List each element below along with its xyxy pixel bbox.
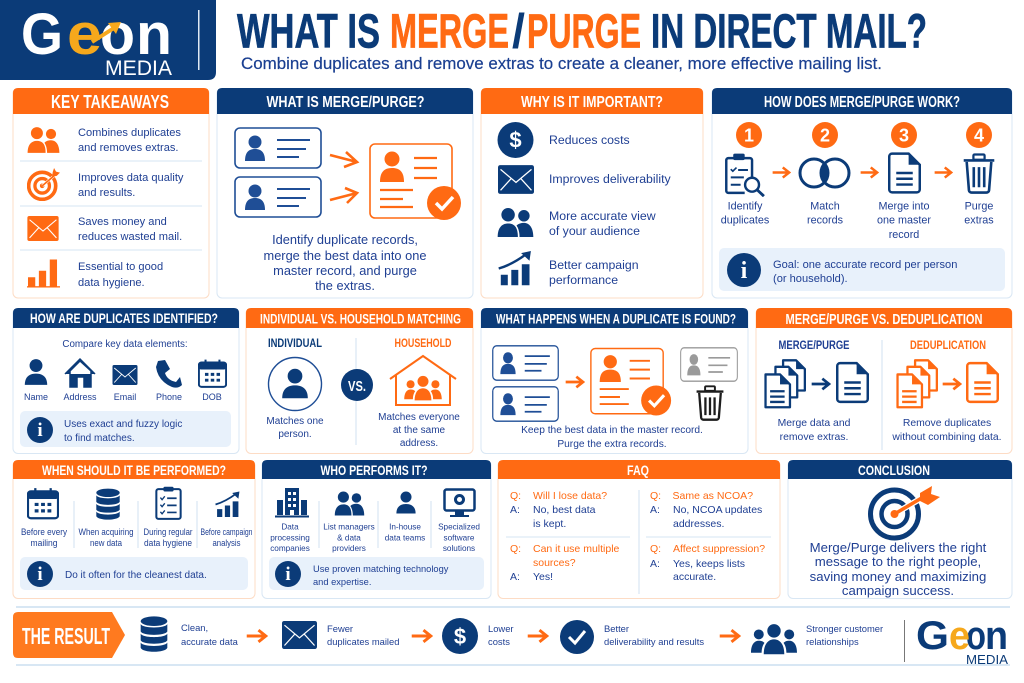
logo: Geon Media footer: e bbox=[949, 614, 970, 658]
conclusion text: message to the right people, bbox=[815, 554, 981, 569]
FAQ answers: No, NCOA updates bbox=[673, 504, 762, 516]
icon: target bbox=[29, 168, 60, 199]
takeaway text 1: and removes extras. bbox=[78, 142, 179, 154]
FAQ answers: Yes, keeps lists bbox=[673, 558, 745, 570]
result strip bbox=[13, 606, 1010, 667]
panel: why is it important: WHY IS IT IMPORTANT? bbox=[521, 94, 663, 111]
step labels: record bbox=[889, 229, 919, 241]
performer labels: solutions bbox=[443, 544, 475, 553]
result 3: costs bbox=[488, 636, 510, 647]
performer labels: processing bbox=[270, 534, 310, 542]
household heading: HOUSEHOLD bbox=[394, 336, 452, 350]
takeaway text 2: and results. bbox=[78, 187, 135, 199]
merge/purge text: remove extras. bbox=[780, 432, 848, 443]
result 1: Clean, bbox=[181, 622, 208, 633]
reason 3: of your audience bbox=[549, 224, 640, 238]
result 5: relationships bbox=[806, 636, 859, 647]
arrow bbox=[720, 630, 739, 642]
icon: growth chart bbox=[499, 251, 531, 285]
panel: when should it be performed bbox=[13, 460, 255, 598]
step numbers: 2 bbox=[820, 126, 830, 146]
panel: conclusion bbox=[788, 460, 1012, 598]
panel: FAQ: FAQ bbox=[627, 462, 649, 478]
merge/purge text: Merge data and bbox=[778, 418, 851, 429]
info callout: to find matches. bbox=[64, 433, 135, 444]
icon: dollar bbox=[442, 618, 478, 654]
timing labels: Before every bbox=[21, 527, 68, 537]
step labels: Purge bbox=[965, 200, 993, 212]
caption: Keep the best data in the master record. bbox=[521, 425, 703, 436]
household text: at the same bbox=[393, 425, 446, 436]
icon: envelope bbox=[282, 621, 317, 649]
title: MERGE bbox=[390, 6, 509, 58]
data element labels: Name bbox=[24, 392, 48, 402]
VS badge: VS. bbox=[348, 378, 366, 395]
icon: check bbox=[560, 620, 594, 654]
timing icons bbox=[28, 487, 239, 520]
arrow bbox=[773, 167, 789, 178]
icon: trash bbox=[964, 154, 994, 193]
icon: database bbox=[141, 616, 167, 652]
performer labels: software bbox=[444, 534, 475, 542]
timing labels: data hygiene bbox=[144, 538, 192, 548]
panel: what happens when a duplicate is found bbox=[481, 308, 748, 454]
takeaway text 3: Saves money and bbox=[78, 216, 167, 228]
icon: bars bbox=[27, 259, 60, 288]
deduplication text: without combining data. bbox=[891, 432, 1002, 443]
FAQ questions: Q: bbox=[510, 543, 521, 555]
FAQ questions: Q: bbox=[650, 543, 661, 555]
info callout: i bbox=[37, 420, 43, 441]
arrow bbox=[412, 630, 431, 642]
conclusion text: Merge/Purge delivers the right bbox=[810, 540, 987, 555]
icon: audience bbox=[498, 208, 533, 237]
step labels: one master bbox=[877, 214, 931, 226]
step labels: duplicates bbox=[721, 214, 770, 226]
panel: key takeaways: KEY TAKEAWAYS bbox=[51, 92, 169, 112]
logo: Geon Media: n bbox=[136, 2, 172, 67]
logo: Geon Media: e bbox=[67, 2, 102, 67]
info callout: and expertise. bbox=[313, 577, 371, 587]
description: Identify duplicate records, bbox=[272, 232, 418, 247]
panel: individual vs household matching bbox=[246, 308, 473, 454]
master record bbox=[591, 348, 671, 416]
purged record bbox=[681, 348, 737, 381]
household icon bbox=[390, 356, 456, 405]
header banner with logo bbox=[0, 0, 216, 80]
icon: envelope bbox=[27, 216, 59, 241]
result 3: Lower bbox=[488, 623, 514, 634]
info callout bbox=[20, 411, 231, 447]
FAQ questions: Affect suppression? bbox=[673, 543, 765, 555]
FAQ questions: Q: bbox=[650, 490, 661, 502]
conclusion text: campaign success. bbox=[842, 583, 954, 598]
icon: envelope bbox=[498, 165, 534, 194]
FAQ answers: accurate. bbox=[673, 571, 716, 583]
FAQ answers: is kept. bbox=[533, 518, 566, 530]
logo: Geon Media footer: MEDIA bbox=[966, 652, 1008, 667]
panel: merge/purge vs deduplication bbox=[756, 308, 1012, 454]
panel: how are duplicates identified: HOW ARE DUPLICATES IDENTIFIED? bbox=[30, 310, 218, 326]
performer labels: data teams bbox=[385, 534, 425, 542]
FAQ answers: A: bbox=[650, 558, 660, 570]
panel: how are duplicates identified bbox=[13, 308, 239, 454]
FAQ questions: sources? bbox=[533, 557, 576, 569]
FAQ questions: Q: bbox=[510, 490, 521, 502]
result 5: Stronger customer bbox=[806, 623, 883, 634]
step numbers: 3 bbox=[899, 126, 909, 146]
FAQ answers: Yes! bbox=[533, 571, 553, 583]
FAQ questions: Same as NCOA? bbox=[672, 490, 753, 502]
FAQ answers: addresses. bbox=[673, 518, 724, 530]
reason 2: Improves deliverability bbox=[549, 172, 671, 186]
FAQ answers: A: bbox=[650, 504, 660, 516]
icon: document bbox=[889, 154, 920, 192]
panel: individual vs household matching: INDIVIDUAL VS. HOUSEHOLD MATCHING bbox=[260, 310, 461, 326]
title: / bbox=[512, 6, 525, 58]
step labels: records bbox=[807, 214, 844, 226]
timing labels: During regular bbox=[144, 527, 193, 537]
lead-in: Compare key data elements: bbox=[62, 339, 188, 350]
icon: trash bbox=[697, 386, 723, 420]
takeaway text 3: reduces wasted mail. bbox=[78, 231, 182, 243]
result 2: Fewer bbox=[327, 623, 353, 634]
logo: Geon Media: MEDIA bbox=[105, 57, 172, 80]
step labels: Match bbox=[810, 200, 840, 212]
icon: people bbox=[28, 127, 59, 153]
info callout: i bbox=[37, 564, 43, 585]
household text: address. bbox=[400, 438, 438, 449]
result 4: Better bbox=[604, 623, 629, 634]
description: merge the best data into one bbox=[264, 248, 426, 263]
description: the extras. bbox=[315, 278, 375, 293]
logo: Geon Media: o bbox=[100, 2, 135, 67]
title: WHAT IS bbox=[237, 6, 380, 58]
caption: Purge the extra records. bbox=[557, 439, 667, 450]
goal callout: Goal: one accurate record per person bbox=[773, 259, 957, 271]
goal callout bbox=[719, 248, 1005, 291]
performer labels: & data bbox=[337, 534, 361, 542]
reason 1: Reduces costs bbox=[549, 133, 630, 147]
icon: overlapping circles bbox=[800, 159, 849, 187]
merge/purge heading: MERGE/PURGE bbox=[778, 338, 850, 352]
banner: the result bbox=[13, 612, 125, 658]
performer icons bbox=[275, 488, 474, 518]
data element labels: DOB bbox=[202, 392, 222, 402]
result 1: accurate data bbox=[181, 636, 239, 647]
reason 4: performance bbox=[549, 273, 618, 287]
timing labels: analysis bbox=[212, 538, 241, 548]
goal callout: i bbox=[741, 258, 748, 284]
FAQ answers: A: bbox=[510, 504, 520, 516]
data element icons bbox=[25, 359, 226, 388]
result 2: duplicates mailed bbox=[327, 636, 399, 647]
takeaway text 4: data hygiene. bbox=[78, 277, 145, 289]
performer labels: Specialized bbox=[438, 522, 480, 532]
panel: what is merge/purge: WHAT IS MERGE/PURGE? bbox=[266, 94, 424, 111]
individual icon bbox=[268, 358, 322, 410]
data element labels: Address bbox=[63, 392, 97, 402]
icon: dollar bbox=[498, 122, 534, 158]
icon: target with arrow bbox=[870, 486, 940, 538]
performer labels: List managers bbox=[323, 522, 375, 532]
deduplication text: Remove duplicates bbox=[903, 418, 991, 429]
step numbers bbox=[736, 122, 992, 148]
panel: FAQ bbox=[498, 460, 780, 598]
arrows into master record bbox=[330, 152, 357, 203]
arrow bbox=[935, 167, 951, 178]
duplicate cards bbox=[493, 346, 558, 421]
data element labels: Email bbox=[114, 392, 136, 402]
master record with check bbox=[370, 144, 461, 220]
info callout: Use proven matching technology bbox=[313, 564, 449, 574]
takeaway text 1: Combines duplicates bbox=[78, 127, 181, 139]
individual text: Matches one bbox=[266, 416, 324, 427]
FAQ answers: A: bbox=[510, 571, 520, 583]
household text: Matches everyone bbox=[378, 412, 460, 423]
takeaway text 2: Improves data quality bbox=[78, 172, 184, 184]
arrow bbox=[861, 167, 877, 178]
logo: Geon Media footer: G bbox=[916, 614, 949, 658]
panel: what is merge/purge bbox=[217, 88, 473, 298]
logo: Geon Media footer: n bbox=[985, 614, 1008, 658]
takeaway text 4: Essential to good bbox=[78, 261, 163, 273]
arrow bbox=[247, 630, 266, 642]
FAQ answers: No, best data bbox=[533, 504, 596, 516]
icon: dollar: $ bbox=[454, 624, 466, 649]
arrow bbox=[566, 377, 583, 387]
timing labels: When acquiring bbox=[78, 527, 134, 537]
info callout: i bbox=[285, 564, 291, 585]
panel: how does merge/purge work bbox=[712, 88, 1012, 298]
duplicate record cards bbox=[235, 128, 321, 217]
logo: Geon Media: G bbox=[21, 2, 63, 67]
timing labels bbox=[21, 527, 253, 548]
icon: customers bbox=[751, 624, 797, 654]
panel: key takeaways bbox=[13, 88, 209, 298]
step labels: extras bbox=[964, 214, 994, 226]
deduplication diagram bbox=[898, 360, 998, 407]
timing labels: new data bbox=[90, 538, 122, 548]
timing labels: mailing bbox=[30, 538, 58, 548]
deduplication heading: DEDUPLICATION bbox=[910, 338, 986, 352]
merge/purge diagram bbox=[766, 360, 868, 407]
conclusion text: saving money and maximizing bbox=[810, 569, 986, 584]
timing labels: Before campaign bbox=[200, 527, 253, 537]
data element labels: Phone bbox=[156, 392, 182, 402]
goal callout: (or household). bbox=[773, 273, 848, 285]
panel: who performs it bbox=[262, 460, 491, 598]
logo: Geon Media bbox=[21, 2, 172, 80]
panel: who performs it: WHO PERFORMS IT? bbox=[320, 462, 428, 478]
FAQ questions: Will I lose data? bbox=[533, 490, 607, 502]
individual text: person. bbox=[278, 429, 312, 440]
FAQ questions: Can it use multiple bbox=[533, 543, 620, 555]
info callout bbox=[269, 557, 484, 590]
reason 4: Better campaign bbox=[549, 258, 639, 272]
step labels: Merge into bbox=[878, 200, 930, 212]
description: master record, and purge bbox=[273, 263, 417, 278]
step numbers: 4 bbox=[974, 126, 984, 146]
panel: what happens when a duplicate is found: WHAT HAPPENS WHEN A DUPLICATE IS FOUND? bbox=[496, 310, 736, 326]
title: PURGE bbox=[527, 6, 641, 58]
reason 3: More accurate view bbox=[549, 209, 656, 223]
panel: conclusion: CONCLUSION bbox=[858, 462, 930, 478]
performer labels: providers bbox=[332, 544, 366, 553]
logo: Geon Media footer bbox=[916, 614, 1008, 667]
panel: why is it important bbox=[481, 88, 703, 298]
performer labels: Data bbox=[281, 522, 299, 532]
performer labels: companies bbox=[270, 544, 310, 553]
VS badge bbox=[341, 369, 373, 401]
banner: the result: THE RESULT bbox=[22, 623, 110, 649]
subtitle: Combine duplicates and remove extras to create a cleaner, more effective mailing list. bbox=[241, 55, 882, 73]
performer labels: In-house bbox=[389, 522, 421, 532]
icon: clipboard search bbox=[726, 154, 764, 196]
title bbox=[237, 6, 927, 58]
arrow bbox=[528, 630, 547, 642]
info callout: Do it often for the cleanest data. bbox=[65, 570, 207, 581]
step numbers: 1 bbox=[744, 126, 754, 146]
result 4: deliverability and results bbox=[604, 636, 704, 647]
icon: dollar: $ bbox=[509, 128, 522, 152]
logo: Geon Media footer: o bbox=[966, 614, 986, 658]
info callout: Uses exact and fuzzy logic bbox=[64, 419, 182, 430]
panel: when should it be performed: WHEN SHOULD IT BE PERFORMED? bbox=[42, 462, 226, 478]
individual heading: INDIVIDUAL bbox=[268, 336, 322, 350]
step labels: Identify bbox=[728, 200, 763, 212]
info callout bbox=[20, 557, 248, 590]
